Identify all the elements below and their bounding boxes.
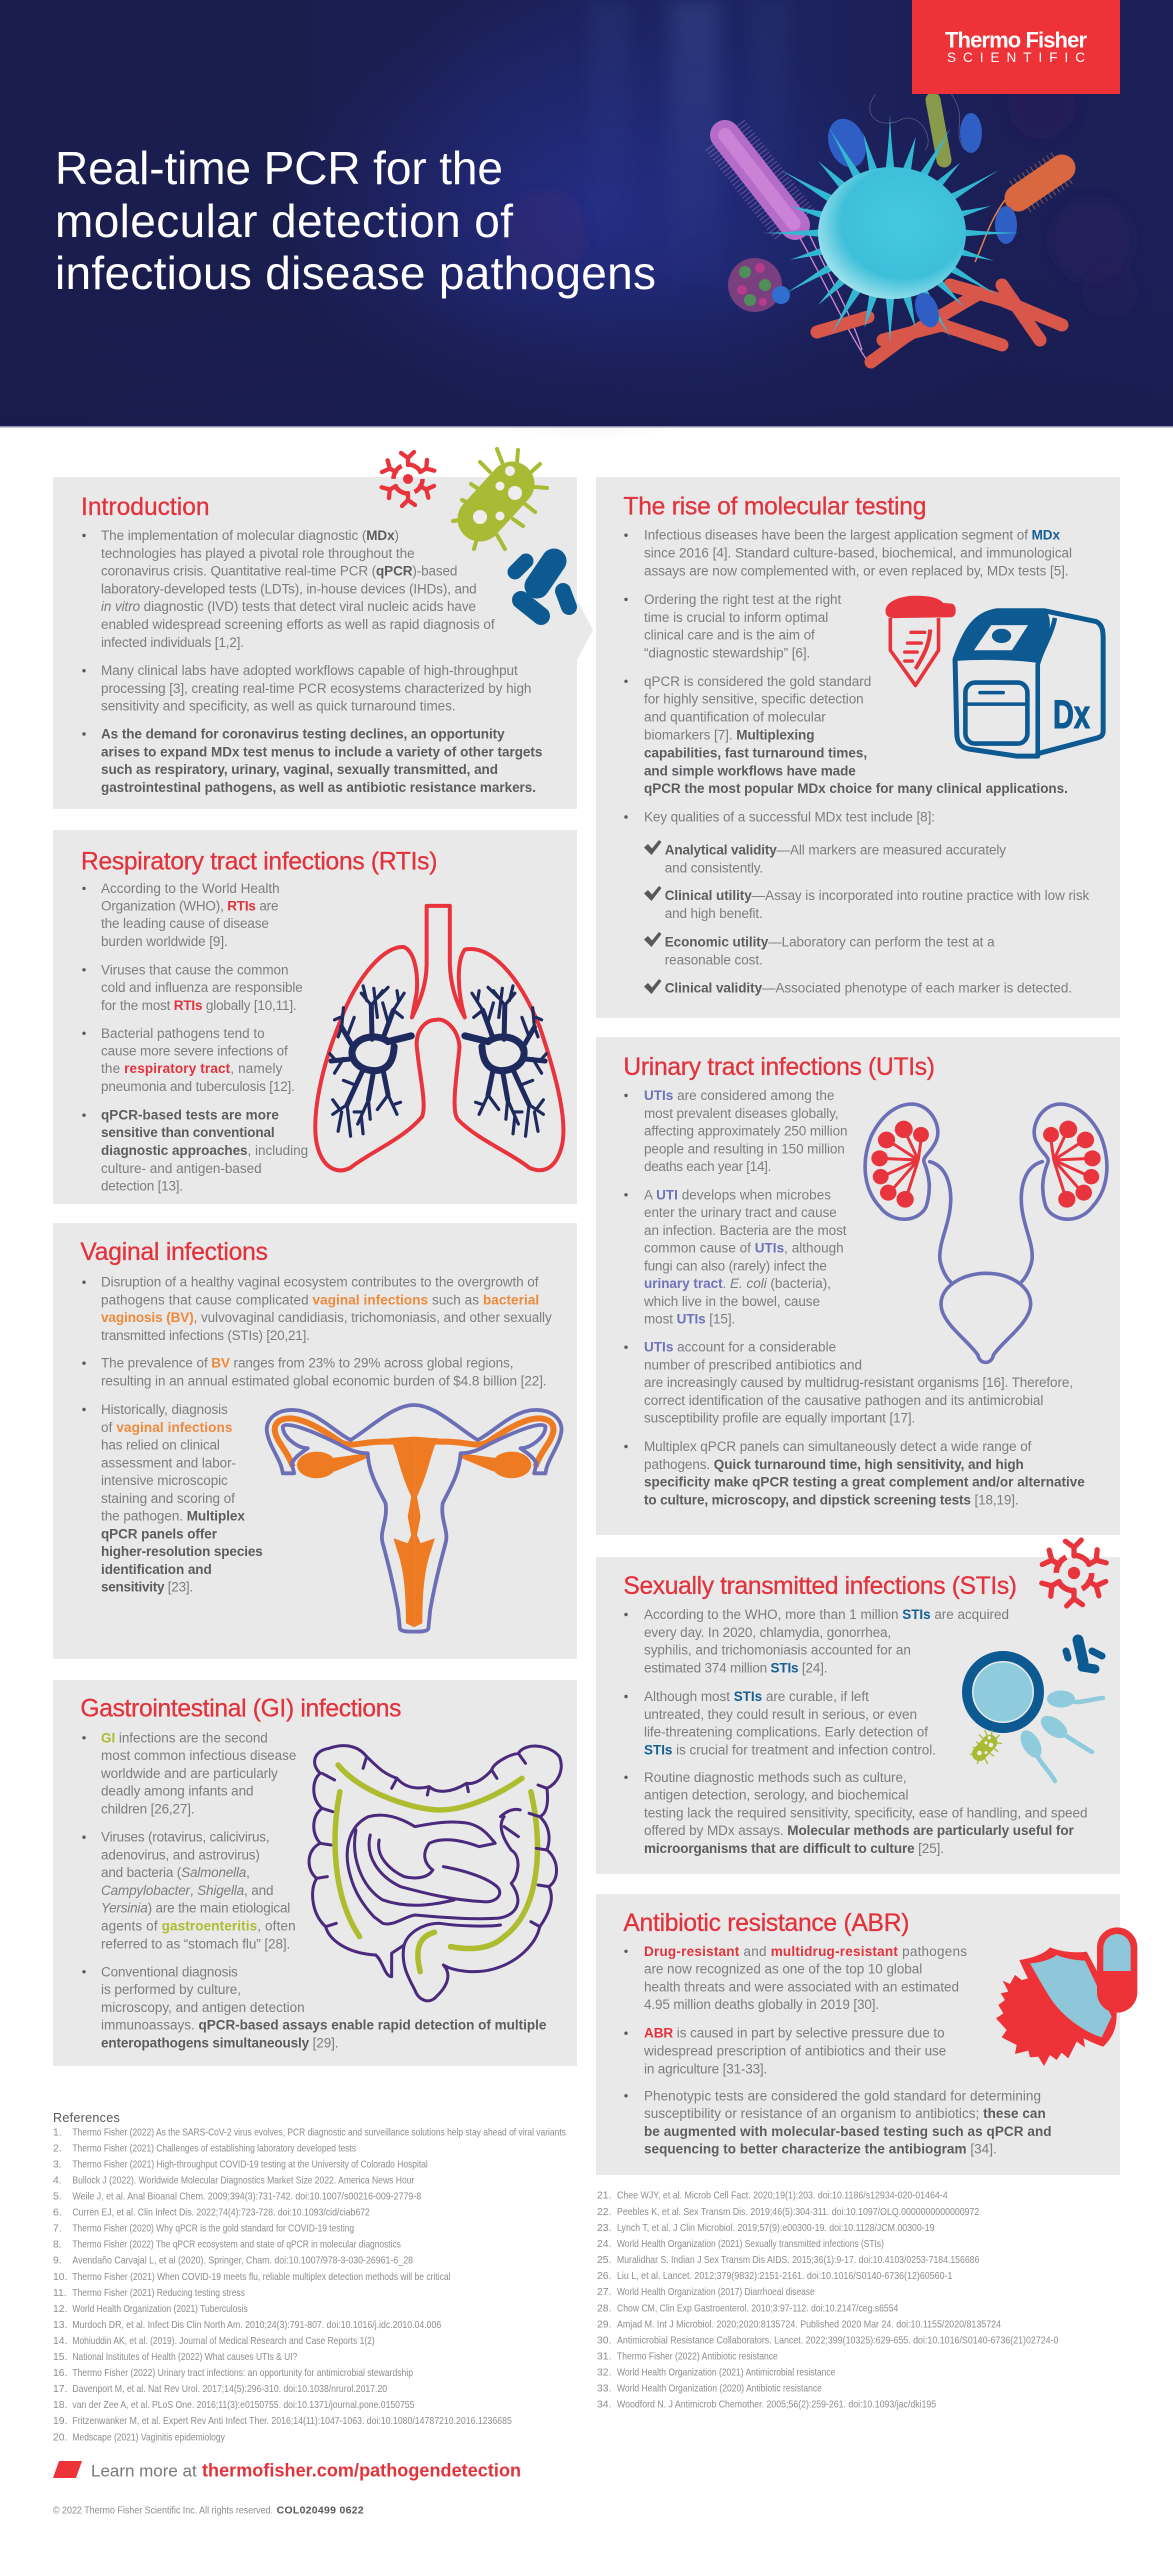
text block: rise bullets: since 2016 [4]. Standard culture-based, biochemical, and immunological [644,546,1072,561]
references: 1 to 20: 18. [53,2400,67,2411]
list: key qualities with check marks [644,840,1090,995]
text block: introduction bullets: enabled widespread screening efforts as well as rapid diagnosis of [101,617,495,632]
text block: introduction bullets: infected individuals [1,2]. [101,635,244,650]
text block: STI bullets: life-threatening complications. Early detection of [644,1725,928,1740]
text block: UTI bullets: affecting approximately 250 million [644,1124,848,1138]
text block: ABR bullets: susceptibility or resistance of an organism to antibiotics; these can [644,2106,1046,2121]
references: 1 to 20: 3. [53,2159,62,2170]
text block: introduction bullets: laboratory-developed tests (LDTs), in-house devices (IHDs), and [101,581,477,596]
references: 1 to 20: Thermo Fisher (2022) As the SARS-CoV-2 virus evolves, PCR diagnostic and surveillance solutions help stay ahead of viral variants [72,2127,566,2138]
text block: GI bullets: GI infections are the second [101,1730,268,1745]
text block: vaginal bullets: higher-resolution species [101,1544,263,1559]
logo: Thermo Fisher Scientific: SCIENTIFIC [947,50,1085,65]
text block: UTI bullets: susceptibility profile are equally important [17]. [644,1411,915,1426]
references: 1 to 20: 11. [53,2288,67,2299]
text block: RTI bullets: diagnostic approaches, including [101,1143,308,1158]
text block: STI bullets: syphilis, and trichomoniasis accounted for an [644,1643,911,1658]
title [55,142,656,299]
text block: RTI bullets: sensitive than conventional [101,1125,275,1140]
heading: Introduction [81,494,210,521]
references: 1 to 20: Thermo Fisher (2022) Urinary tract infections: an opportunity for antimicrobial stewardship [72,2368,413,2379]
list: key qualities with check marks: and consistently. [665,860,763,875]
text block: STI bullets [624,1607,1088,1856]
list: key qualities with check marks: Analytical validity—All markers are measured accurately [665,842,1006,858]
text block: introduction bullets: gastrointestinal pathogens, as well as antibiotic resistance markers. [101,780,536,795]
text block: UTI bullets: A UTI develops when microbes [644,1187,831,1202]
text block: GI bullets: microscopy, and antigen detection [101,2000,305,2015]
list: key qualities with check marks: Economic utility—Laboratory can perform the test at a [665,934,995,949]
text block: GI bullets: deadly among infants and [101,1784,254,1799]
text block: rise bullets: and simple workflows have made [644,763,856,778]
text block: UTI bullets: fungi can also (rarely) infect the [644,1258,827,1273]
references: 21 to 34: 26. [597,2271,611,2282]
text block: ABR bullets: widespread prescription of antibiotics and their use [643,2044,946,2058]
text block: RTI bullets [82,881,308,1194]
text block: RTI bullets: qPCR-based tests are more [101,1108,279,1123]
text block: STI bullets: microorganisms that are difficult to culture [25]. [644,1841,944,1856]
text block: UTI bullets: most UTIs [15]. [644,1312,735,1327]
text block: rise bullets: Key qualities of a successful MDx test include [8]: [644,810,935,824]
references: 21 to 34: 33. [597,2384,611,2395]
text block: UTI bullets: number of prescribed antibiotics and [644,1357,862,1372]
references: 21 to 34: 28. [597,2303,611,2314]
text block: GI bullets: agents of gastroenteritis, often [101,1918,296,1934]
text block: ABR bullets: health threats and were associated with an estimated [644,1979,959,1994]
references: 1 to 20: 20. [53,2432,67,2443]
references: 1 to 20: Murdoch DR, et al. Infect Dis Clin North Am. 2010;24(3):791-807. doi:10.1016/j.idc.2010.04.006 [72,2320,441,2331]
references: 1 to 20: Thermo Fisher (2021) High-throughput COVID-19 testing at the University of Colorado Hospital [72,2159,428,2170]
text block: ABR bullets: Drug-resistant and multidrug-resistant pathogens [644,1944,967,1959]
panel: Urinary tract infections [596,1037,1120,1535]
text block: RTI bullets: culture- and antigen-based [101,1161,262,1176]
references: 1 to 20: World Health Organization (2021) Tuberculosis [72,2304,248,2315]
references: 1 to 20: Thermo Fisher (2020) Why qPCR is the gold standard for COVID-19 testing [72,2224,354,2235]
logo: Thermo Fisher Scientific [912,0,1120,94]
references: 1 to 20: 5. [53,2192,62,2202]
references: 21 to 34: World Health Organization (2020) Antibiotic resistance [617,2384,822,2395]
references: 21 to 34: 31. [597,2352,611,2362]
references: 21 to 34: 22. [597,2207,611,2218]
text block: UTI bullets: enter the urinary tract and cause [644,1205,837,1220]
references: 1 to 20: Davenport M, et al. Nat Rev Urol. 2017;14(5):296-310. doi:10.1038/nrurol.2017.20 [72,2384,387,2395]
references: 1 to 20: 7. [53,2224,62,2235]
text block: STI bullets: estimated 374 million STIs [24]. [644,1660,828,1675]
text block: GI bullets: adenovirus, and astrovirus) [101,1847,260,1862]
text block: ABR bullets: Phenotypic tests are considered the gold standard for determining [644,2088,1041,2103]
panel: hero banner [0,0,1173,440]
references: 21 to 34: World Health Organization (2017) Diarrhoeal disease [617,2287,815,2298]
text block: vaginal bullets: resulting in an annual estimated global economic burden of $4.8 billion [22]. [101,1374,547,1388]
text block: STI bullets: According to the WHO, more than 1 million STIs are acquired [644,1607,1009,1622]
references: 21 to 34: Woodford N. J Antimicrob Chemother. 2005;56(2):259-261. doi:10.1093/jac/dki195 [617,2400,936,2411]
references: 1 to 20: Fritzenwanker M, et al. Expert Rev Anti Infect Ther. 2016;14(11):1047-1063. doi:10.1080/14787210.2016.1236685 [72,2416,512,2427]
references: 1 to 20: 2. [53,2143,62,2154]
references: 1 to 20: Bullock J (2022). Worldwide Molecular Diagnostics Market Size 2022. America News Hour [72,2175,415,2186]
text block: UTI bullets: people and resulting in 150 million [644,1141,845,1156]
text block: RTI bullets: Viruses that cause the common [101,962,288,977]
text block: rise bullets: Ordering the right test at the right [644,592,842,607]
references: 1 to 20: Thermo Fisher (2021) Reducing testing stress [72,2288,245,2299]
text block: rise bullets: capabilities, fast turnaround times, [644,745,867,760]
references: 1 to 20: References [53,2111,120,2125]
references: 21 to 34: 27. [597,2287,611,2298]
text block: vaginal bullets: The prevalence of BV ranges from 23% to 29% across global regions, [101,1356,514,1371]
text block: rise bullets: clinical care and is the aim of [644,628,815,643]
text block: GI bullets: Viruses (rotavirus, calicivirus, [101,1830,270,1845]
text block: vaginal bullets: identification and [101,1562,212,1577]
references: 21 to 34: Chee WJY, et al. Microb Cell Fact. 2020;19(1):203. doi:10.1186/s12934-020-01464-4 [617,2191,948,2202]
text block: vaginal bullets: Historically, diagnosis [101,1402,228,1417]
references: 1 to 20: 1. [53,2127,62,2138]
references: 1 to 20: 9. [53,2256,62,2267]
references: 21 to 34: 32. [597,2368,611,2379]
heading: Sexually transmitted infections (STIs) [623,1573,1017,1600]
text block: vaginal bullets: pathogens that cause complicated vaginal infections such as bacterial [101,1292,539,1308]
text block: UTI bullets: Multiplex qPCR panels can simultaneously detect a wide range of [644,1439,1032,1454]
references: 21 to 34: Peebles K, et al. Sex Transm Dis. 2019;46(5):304-311. doi:10.1097/OLQ.0000000000000972 [617,2207,979,2218]
references: 21 to 34: 34. [597,2400,611,2411]
references: 21 to 34: Amjad M. Int J Microbiol. 2020;2020:8135724. Published 2020 Mar 24. doi:10.1155/2020/8135724 [617,2319,1001,2330]
text block: vaginal bullets: of vaginal infections [101,1420,232,1435]
references: 21 to 34: 23. [597,2223,611,2234]
references: 1 to 20: Thermo Fisher (2021) Challenges of establishing laboratory developed tests [72,2143,356,2154]
text block: GI bullets: most common infectious disease [101,1748,296,1763]
text block: RTI bullets: cold and influenza are responsible [101,980,303,995]
icon: kidneys and bladder [865,1104,1107,1362]
text block: STI bullets: Routine diagnostic methods such as culture, [644,1770,907,1785]
text block: GI bullets: children [26,27]. [101,1801,195,1816]
references: 1 to 20: 8. [53,2240,62,2251]
text block: UTI bullets: pathogens. Quick turnaround time, high sensitivity, and high [644,1457,1024,1472]
text block: GI bullets: is performed by culture, [101,1982,241,1997]
text block: rise bullets: for highly sensitive, specific detection [644,692,864,707]
text block: UTI bullets: are increasingly caused by multidrug-resistant organisms [16]. Therefore, [644,1375,1073,1390]
references: 1 to 20: Avendaño Carvajal L, et al (2020). Springer, Cham. doi:10.1007/978-3-030-26961-6_28 [72,2256,413,2267]
text block: rise bullets: Infectious diseases have been the largest application segment of MDx [644,528,1060,543]
text block: UTI bullets: UTIs account for a considerable [644,1340,836,1355]
text block: ABR bullets: are now recognized as one of the top 10 global [644,1962,922,1977]
text block: introduction bullets: arises to expand MDx test menus to include a variety of other targets [101,744,542,759]
text block: introduction bullets: Many clinical labs have adopted workflows capable of high-throughput [101,663,518,678]
references: 21 to 34: Antimicrobial Resistance Collaborators. Lancet. 2022;399(10325):629-655. doi:10.1016/S0140-6736(21)02724-0 [617,2335,1059,2346]
references: 1 to 20: 17. [53,2384,67,2395]
text block: ABR bullets: 4.95 million deaths globally in 2019 [30]. [644,1997,879,2012]
references: 1 to 20 [53,2111,566,2443]
references: 1 to 20: 16. [53,2368,67,2379]
icon: lungs [315,906,563,1170]
text block: RTI bullets: cause more severe infections of [101,1044,288,1059]
text block: STI bullets: antigen detection, serology, and biochemical [644,1788,908,1803]
references: 1 to 20: Weile J, et al. Anal Bioanal Chem. 2009;394(3):731-742. doi:10.1007/s00216-009-2779-8 [72,2192,421,2202]
text block: vaginal bullets: the pathogen. Multiplex [101,1509,245,1524]
call to action: learn more [53,2461,521,2481]
text block: STI bullets: Although most STIs are curable, if left [644,1689,869,1704]
references: 1 to 20: Thermo Fisher (2022) The qPCR ecosystem and state of qPCR in molecular diagnostics [72,2240,401,2251]
icon: intestines [309,1746,561,2001]
list: key qualities with check marks: Clinical validity—Associated phenotype of each marker is detected. [665,980,1072,995]
text block: vaginal bullets: intensive microscopic [101,1473,228,1488]
text block: introduction bullets: processing [3], creating real-time PCR ecosystems characterized by high [101,681,531,696]
panel: Antibiotic resistance [596,1894,1137,2175]
icon: blue bacilli [515,561,569,616]
text block: introduction bullets: technologies has played a pivotal role throughout the [101,546,415,561]
text block: rise bullets [624,528,1072,824]
text block: UTI bullets [624,1088,1085,1507]
text block: STI bullets: STIs is crucial for treatment and infection control. [644,1742,936,1757]
panel: Introduction [53,449,593,809]
text block: GI bullets: Yersinia) are the main etiological [101,1901,290,1916]
text block: RTI bullets: Organization (WHO), RTIs are [101,899,278,914]
text block: RTI bullets: the respiratory tract, namely [101,1061,283,1076]
icon: uterus [267,1405,562,1632]
text block: vaginal bullets: vaginosis (BV), vulvovaginal candidiasis, trichomoniasis, and other sexually [101,1310,552,1325]
text block: rise bullets: qPCR the most popular MDx choice for many clinical applications. [644,781,1068,796]
text block: STI bullets: every day. In 2020, chlamydia, gonorrhea, [644,1625,891,1640]
references: 1 to 20: Curren EJ, et al. Clin Infect Dis. 2022;74(4):723-728. doi:10.1093/cid/ciab672 [72,2208,370,2219]
panel: Sexually transmitted infections [596,1540,1120,1874]
text block: ABR bullets: ABR is caused in part by selective pressure due to [644,2026,945,2041]
text block: GI bullets: and bacteria (Salmonella, [101,1865,250,1880]
text block: vaginal bullets [82,1275,552,1595]
text block: introduction bullets: The implementation of molecular diagnostic (MDx) [101,528,399,543]
text block: RTI bullets: for the most RTIs globally [10,11]. [101,998,297,1013]
text block: vaginal bullets: qPCR panels offer [101,1526,218,1541]
references: 21 to 34: Liu L, et al. Lancet. 2012;379(9832):2151-2161. doi:10.1016/S0140-6736(12)60560-1 [617,2271,953,2282]
references: 1 to 20: 12. [53,2304,67,2315]
heading: Gastrointestinal (GI) infections [80,1696,401,1723]
text block: RTI bullets: detection [13]. [101,1178,183,1194]
references: 1 to 20: van der Zee A, et al. PLoS One. 2016;11(3):e0150755. doi:10.1371/journal.pone.0150755 [72,2400,415,2411]
text block: UTI bullets: to culture, microscopy, and dipstick screening tests [18,19]. [644,1492,1019,1507]
text block: RTI bullets: the leading cause of disease [101,916,269,931]
call to action: learn more: Learn more at [91,2462,197,2481]
references: 1 to 20: 6. [53,2208,62,2219]
text block: GI bullets: referred to as “stomach flu” [28]. [101,1936,290,1951]
text block: introduction bullets: sensitivity and specificity, as well as quick turnaround times. [101,699,456,714]
list: key qualities with check marks: reasonable cost. [665,952,763,967]
references: 1 to 20: 13. [53,2320,67,2331]
title: Real-time PCR for the [55,142,503,194]
text block: UTI bullets: an infection. Bacteria are the most [644,1223,847,1238]
references: 1 to 20: 10. [53,2272,67,2283]
icon: red virus [381,452,435,506]
text block: introduction bullets: in vitro diagnostic (IVD) tests that detect viral nucleic acids have [101,599,476,614]
text block: UTI bullets: which live in the bowel, cause [643,1294,820,1309]
text block: ABR bullets: be augmented with molecular-based testing such as qPCR and [644,2124,1052,2139]
icon label: Dx: Dx [1053,693,1090,737]
text block: STI bullets: testing lack the required sensitivity, specificity, ease of handling, and speed [644,1805,1088,1820]
text block: vaginal bullets: staining and scoring of [101,1491,235,1506]
icon: green bacterium [453,449,547,549]
panel: Gastrointestinal infections [53,1680,577,2066]
panel: Respiratory tract infections [53,830,577,1204]
text block: rise bullets: “diagnostic stewardship” [6]. [644,646,810,661]
text block: RTI bullets: According to the World Health [101,881,280,896]
references: 21 to 34: Thermo Fisher (2022) Antibiotic resistance [617,2352,778,2362]
references: 21 to 34: Lynch T, et al. J Clin Microbiol. 2019;57(9):e00300-19. doi:10.1128/JCM.00300-19 [617,2223,935,2234]
panel: The rise of molecular testing [596,477,1120,1018]
text block: ABR bullets [624,1944,1052,2157]
illustration: pathogens [725,92,1062,365]
text block: GI bullets: enteropathogens simultaneously [29]. [101,2035,338,2050]
references: 1 to 20: Medscape (2021) Vaginitis epidemiology [72,2432,226,2443]
text block: introduction bullets: As the demand for coronavirus testing declines, an opportunity [101,727,505,742]
text block: UTI bullets: UTIs are considered among the [644,1088,834,1103]
call to action: learn more: thermofisher.com/pathogendetection [202,2461,521,2481]
references: 21 to 34: World Health Organization (2021) Sexually transmitted infections (STIs) [617,2239,884,2250]
text block: vaginal bullets: sensitivity [23]. [101,1580,193,1595]
heading: Respiratory tract infections (RTIs) [81,849,437,876]
text block: vaginal bullets: Disruption of a healthy vaginal ecosystem contributes to the overgrowth of [101,1275,539,1290]
text block: rise bullets: qPCR is considered the gold standard [644,674,871,689]
references: 21 to 34: 29. [597,2319,611,2330]
references: 1 to 20: Mohiuddin AK, et al. (2019). Journal of Medical Research and Case Reports 1(2) [72,2336,375,2347]
text block: UTI bullets: specificity make qPCR testing a great complement and/or alternative [644,1474,1085,1490]
references: 21 to 34: 24. [597,2239,611,2250]
text block: introduction bullets: coronavirus crisis. Quantitative real-time PCR (qPCR)-based [101,564,457,579]
title: molecular detection of [55,195,513,247]
text block: UTI bullets: correct identification of the causative pathogen and its antimicrobial [644,1393,1043,1408]
references: 21 to 34: World Health Organization (2021) Antimicrobial resistance [617,2368,835,2379]
text block: rise bullets: assays are now complemented with, or even replaced by, MDx tests [5]. [644,564,1069,578]
panel: Vaginal infections [53,1223,577,1659]
icon: Dx instrument [955,611,1103,756]
logo: Thermo Fisher Scientific: Thermo Fisher [945,28,1087,52]
references: 21 to 34 [597,2191,1059,2411]
references: 21 to 34: 21. [597,2191,611,2202]
references: 21 to 34: Chow CM, Clin Exp Gastroenterol. 2010;3:97-112. doi:10.2147/ceg.s6554 [617,2303,898,2314]
list: key qualities with check marks: Clinical utility—Assay is incorporated into routine practice with low risk [665,888,1090,903]
text block: rise bullets: biomarkers [7]. Multiplexing [644,728,814,742]
text block: GI bullets: Campylobacter, Shigella, and [101,1883,274,1898]
icon: resistant microbe, shield and pill [996,1927,1137,2066]
references: 1 to 20: National Institutes of Health (2022) What causes UTIs & UI? [72,2352,297,2363]
heading: Urinary tract infections (UTIs) [623,1054,935,1081]
footer: copyright: COL020499 0622 [277,2506,364,2517]
references: 1 to 20: 14. [53,2336,67,2347]
text block: rise bullets: time is crucial to inform optimal [644,610,828,625]
text block: introduction bullets: such as respiratory, urinary, vaginal, sexually transmitted, and [101,762,498,777]
text block: rise bullets: and quantification of molecular [644,710,826,725]
references: 1 to 20: 19. [53,2416,67,2427]
text block: vaginal bullets: has relied on clinical [101,1438,220,1452]
text block: RTI bullets: pneumonia and tuberculosis [12]. [101,1079,295,1094]
text block: ABR bullets: in agriculture [31-33]. [644,2061,767,2076]
icon: red virus [1041,1540,1107,1606]
text block: vaginal bullets: transmitted infections (STIs) [20,21]. [101,1328,310,1343]
text block: STI bullets: offered by MDx assays. Molecular methods are particularly useful for [644,1823,1075,1838]
text block: UTI bullets: most prevalent diseases globally, [644,1106,839,1121]
text block: GI bullets: immunoassays. qPCR-based assays enable rapid detection of multiple [101,2018,547,2033]
text block: introduction bullets [82,528,542,795]
text block: GI bullets: worldwide and are particularly [100,1766,278,1781]
text block: UTI bullets: common cause of UTIs, although [644,1241,844,1256]
text block: vaginal bullets: assessment and labor- [101,1455,236,1470]
text block: GI bullets [82,1730,547,2050]
text block: RTI bullets: burden worldwide [9]. [101,934,228,949]
text block: UTI bullets: urinary tract. E. coli (bacteria), [644,1276,831,1291]
text block: ABR bullets: sequencing to better characterize the antibiogram [34]. [644,2142,997,2157]
references: 21 to 34: Muralidhar S. Indian J Sex Transm Dis AIDS. 2015;36(1):9-17. doi:10.4103/0253-7184.156686 [617,2255,979,2266]
heading: Vaginal infections [80,1239,268,1266]
title: infectious disease pathogens [55,247,656,299]
references: 21 to 34: 25. [597,2255,611,2266]
heading: The rise of molecular testing [623,494,926,521]
text block: RTI bullets: Bacterial pathogens tend to [101,1026,265,1041]
list: key qualities with check marks: and high benefit. [665,906,763,921]
text block: UTI bullets: deaths each year [14]. [644,1159,771,1174]
text block: STI bullets: untreated, they could result in serious, or even [644,1707,917,1722]
references: 1 to 20: Thermo Fisher (2021) When COVID-19 meets flu, reliable multiplex detection methods will be critical [72,2272,451,2283]
icon: PCR tube [885,596,956,685]
icon: egg cell, sperm and microbes [967,1640,1103,1781]
heading: Antibiotic resistance (ABR) [623,1910,909,1937]
text block: GI bullets: Conventional diagnosis [101,1964,238,1979]
footer: copyright: © 2022 Thermo Fisher Scientific Inc. All rights reserved. [53,2506,273,2517]
references: 21 to 34: 30. [597,2335,611,2346]
references: 1 to 20: 4. [53,2175,62,2186]
references: 1 to 20: 15. [53,2352,67,2363]
